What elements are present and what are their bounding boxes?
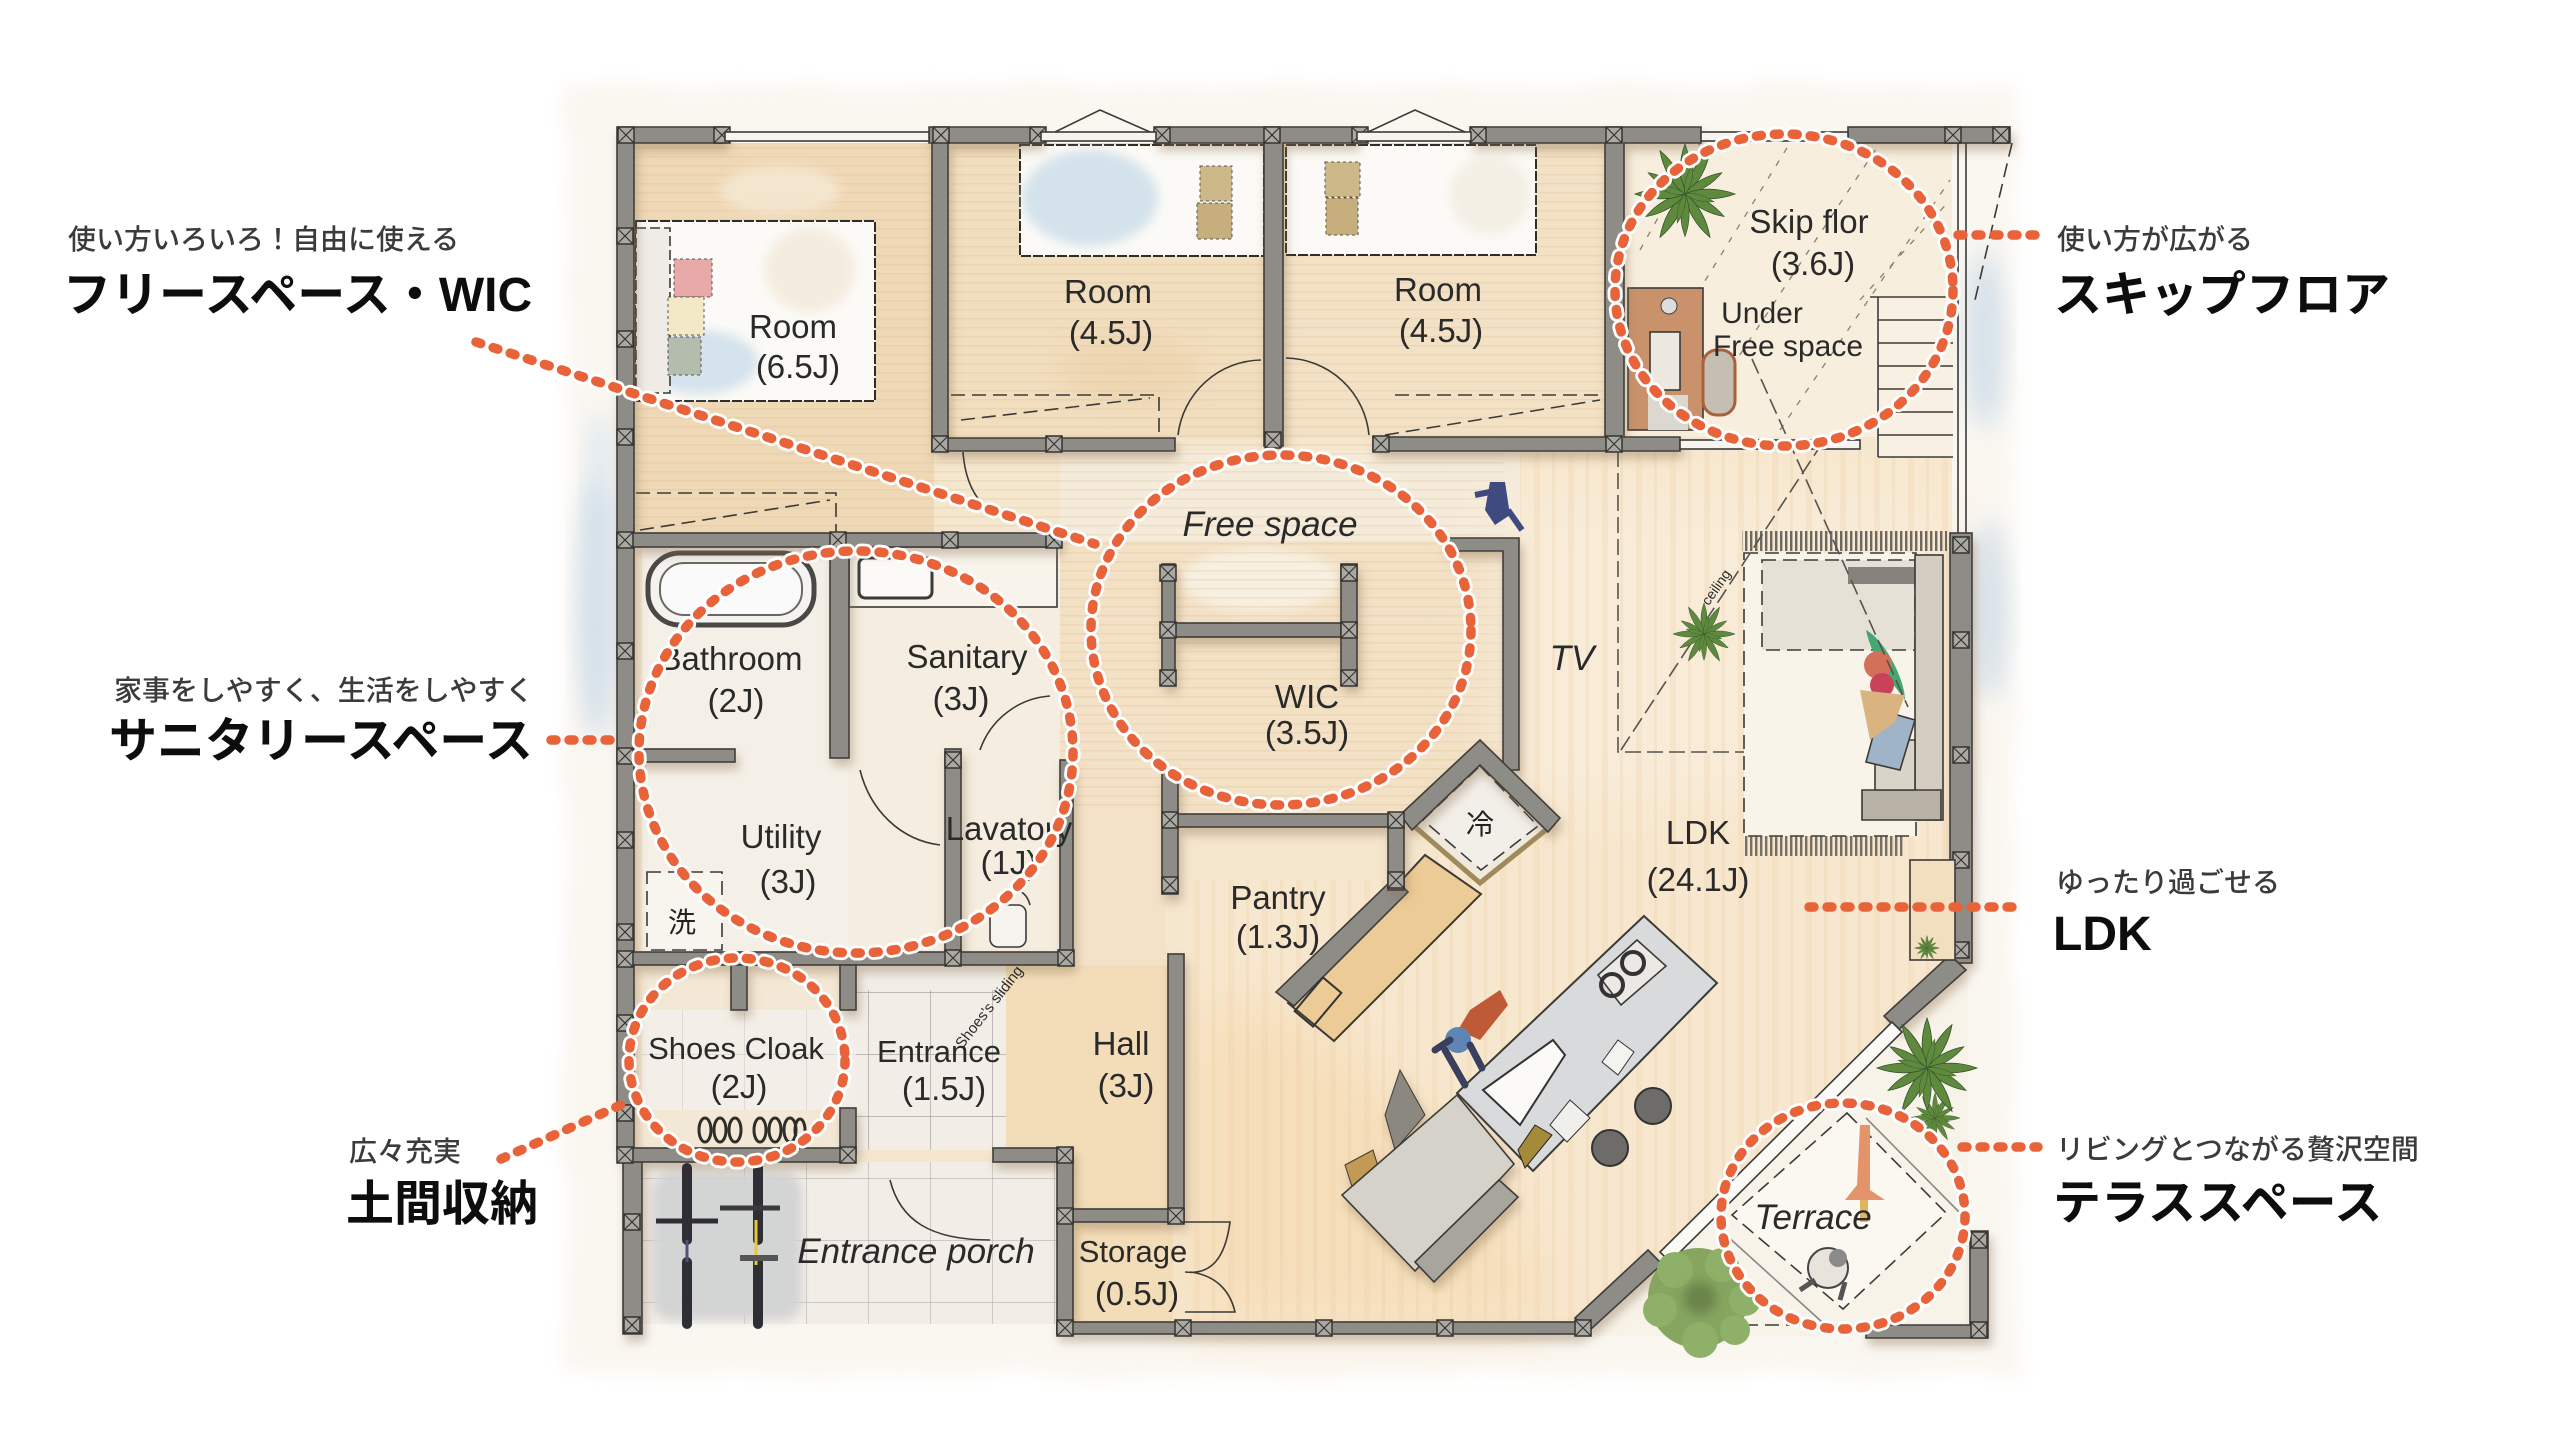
room labels: Storage <box>1079 1234 1187 1269</box>
room labels: (6.5J) <box>756 348 840 385</box>
callout: skip floor: 使い方が広がる <box>2057 224 2253 255</box>
washing machine and toilet <box>647 872 1030 950</box>
plants: terrace side <box>1877 1018 1977 1141</box>
leader line: sanitary <box>551 735 620 745</box>
plant: skip floor <box>1635 144 1735 240</box>
room labels: Shoes Cloak <box>648 1031 824 1066</box>
room labels: Utility <box>741 818 822 855</box>
doors <box>860 358 1369 1312</box>
ceiling guide lines <box>1618 359 1908 752</box>
floor: entrance, shoes cloak and hall <box>642 965 1168 1210</box>
bathtub <box>648 553 814 625</box>
terrace dog and person <box>1800 1125 1885 1300</box>
room labels: (3J) <box>933 680 989 717</box>
floor: entrance porch <box>642 1162 1057 1324</box>
fridge: 冷 <box>1466 809 1494 840</box>
room labels: (3.6J) <box>1771 245 1855 282</box>
skip floor desk and chair <box>1628 288 1735 430</box>
callout: earthen floor storage: 土間収納 <box>346 1178 538 1231</box>
person in kitchen <box>1435 990 1508 1085</box>
callout: LDK: ゆったり過ごせる <box>2056 867 2280 898</box>
room labels: WIC <box>1275 678 1339 715</box>
room labels: (1.3J) <box>1236 918 1320 955</box>
callout: free space and WIC <box>63 224 532 322</box>
room labels: TV <box>1550 639 1598 678</box>
sofa and rug <box>1742 531 1947 856</box>
room labels: Terrace <box>1754 1198 1872 1237</box>
leader line: skip floor <box>1958 230 2039 240</box>
plant: round leaf shrub <box>1643 1248 1761 1358</box>
plant: living room <box>1673 603 1735 662</box>
floor: bedrooms wood <box>634 143 1605 535</box>
callout: skip floor: スキップフロア <box>2054 269 2390 322</box>
kitchen back wall and counter <box>1276 855 1481 1041</box>
plant: small LDK corner <box>1910 860 1955 960</box>
room labels: Lavatory <box>946 810 1073 847</box>
room labels: (0.5J) <box>1095 1275 1179 1312</box>
bed: room 6.5J <box>636 221 875 401</box>
stairs <box>1870 297 1953 457</box>
room labels: (4.5J) <box>1399 312 1483 349</box>
room labels: (2J) <box>708 682 764 719</box>
windows <box>725 110 2012 1262</box>
callout: sanitary space: サニタリースペース <box>109 715 533 768</box>
room labels: Free space <box>1182 505 1358 544</box>
callout: earthen floor storage <box>346 1136 538 1231</box>
dining table and bench <box>1342 1070 1518 1282</box>
highlight circle: shoes cloak <box>629 958 845 1162</box>
watercolor paper background <box>566 85 2016 1375</box>
washbasin counter <box>849 547 1057 607</box>
callout: terrace space: リビングとつながる贅沢空間 <box>2056 1134 2419 1165</box>
callout: free space and WIC: 使い方いろいろ！自由に使える <box>68 224 459 255</box>
callout: free space and WIC: フリースペース・WIC <box>63 269 532 322</box>
callout: sanitary space <box>109 675 533 768</box>
room labels: Sanitary <box>906 638 1028 675</box>
room labels: Pantry <box>1230 879 1326 916</box>
kitchen island <box>1457 916 1717 1171</box>
highlight circle: skip floor <box>1615 134 1953 446</box>
wall posts <box>617 127 2009 1338</box>
bicycles <box>656 1168 780 1324</box>
room labels: (2J) <box>711 1068 767 1105</box>
shoes on shelf <box>699 1118 805 1142</box>
room labels: Entrance porch <box>797 1232 1035 1271</box>
room labels: ceiling <box>1698 566 1734 608</box>
leader line: shoes cloak <box>501 1104 623 1159</box>
leader line: LDK <box>1809 902 2019 912</box>
callout: LDK: LDK <box>2053 908 2152 961</box>
bed: room 4.5J west <box>1020 145 1264 256</box>
callout: sanitary space: 家事をしやすく、生活をしやすく <box>114 675 533 706</box>
callout: terrace space <box>2053 1134 2419 1230</box>
washing machine and toilet: 洗 <box>668 907 696 938</box>
walls <box>617 127 2010 1338</box>
floor: wet rooms <box>642 547 1060 952</box>
room labels: Free space <box>1713 330 1863 363</box>
callout: skip floor <box>2054 224 2390 322</box>
fridge <box>1407 751 1552 883</box>
room labels: Skip flor <box>1749 203 1869 240</box>
room labels: Room <box>749 308 837 345</box>
room labels: (3J) <box>1098 1067 1154 1104</box>
closets <box>636 395 1605 533</box>
room labels: Room <box>1394 271 1482 308</box>
room labels: LDK <box>1666 814 1730 851</box>
floor: interior base wash <box>634 143 1952 1323</box>
room labels: (4.5J) <box>1069 314 1153 351</box>
floor: LDK wood <box>1184 451 1952 1322</box>
leader line: free space <box>476 342 1095 544</box>
leader line: terrace <box>1962 1142 2038 1152</box>
room labels: (24.1J) <box>1647 861 1749 898</box>
highlight circle: sanitary space <box>639 551 1073 953</box>
room labels <box>648 203 1872 1312</box>
callout: earthen floor storage: 広々充実 <box>349 1136 461 1167</box>
floor: skip floor <box>1624 143 1952 437</box>
person on sofa <box>1860 630 1905 740</box>
room labels: Entrance <box>877 1034 1001 1069</box>
room labels: (1.5J) <box>902 1070 986 1107</box>
room labels: (3J) <box>760 863 816 900</box>
room labels: (3.5J) <box>1265 714 1349 751</box>
room labels: Shoes's sliding <box>952 963 1027 1052</box>
room labels: Hall <box>1093 1025 1149 1062</box>
callout: terrace space: テラススペース <box>2053 1177 2382 1230</box>
room labels: Room <box>1064 273 1152 310</box>
floor: storage <box>1073 1222 1173 1322</box>
room labels: Under <box>1721 297 1803 330</box>
terrace deck <box>1575 965 1968 1336</box>
room labels: Bathroom <box>659 640 803 677</box>
highlight circle: terrace <box>1721 1103 1965 1329</box>
callout: LDK <box>2053 867 2280 961</box>
floor: free space and WIC <box>1060 451 1620 970</box>
stools <box>1592 1088 1671 1166</box>
bed: room 4.5J east <box>1286 145 1536 255</box>
person in hallway <box>1475 482 1522 530</box>
highlight circle: free space and WIC <box>1091 455 1471 805</box>
room labels: (1J) <box>981 844 1037 881</box>
